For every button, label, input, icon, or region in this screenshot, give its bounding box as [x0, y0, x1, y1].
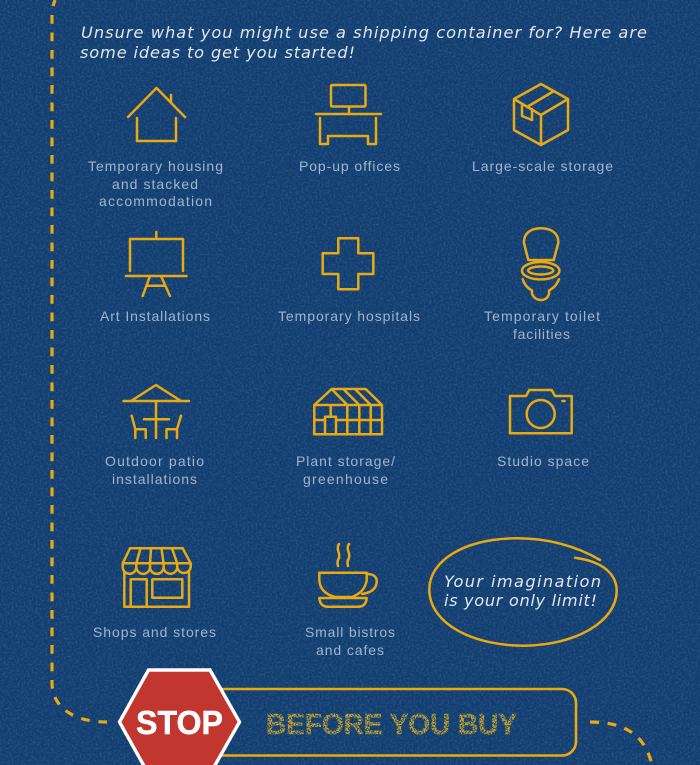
label: temporary toilet facilities: facilities [513, 326, 570, 342]
hand-drawn ellipse [429, 538, 617, 646]
label: small bistros and cafes [305, 624, 395, 658]
label: temporary housing: accommodation [99, 193, 212, 209]
intro text: some ideas to get you started! [80, 43, 355, 62]
item: plant storage / greenhouse [296, 389, 395, 487]
item: studio space [497, 390, 589, 469]
label: small bistros and cafes: and cafes [316, 642, 384, 658]
label: plant storage / greenhouse: greenhouse [303, 471, 388, 487]
item: temporary hospitals [278, 238, 420, 324]
item: outdoor patio installations [105, 385, 204, 487]
label: pop-up offices: Pop-up offices [299, 158, 400, 174]
dashed route line left [52, 0, 107, 722]
intro text [80, 23, 647, 62]
stop sign text: STOP [136, 704, 223, 741]
callout text: Your imagination [444, 572, 601, 591]
item: temporary toilet facilities [484, 228, 600, 342]
item: shops and stores [93, 548, 216, 640]
label: outdoor patio installations: installations [112, 471, 197, 487]
label: outdoor patio installations [105, 453, 204, 487]
stop sign [120, 670, 240, 765]
banner outline [205, 689, 576, 756]
icon: toilet [522, 228, 559, 300]
label: studio space: Studio space [497, 453, 589, 469]
item: pop-up offices [299, 85, 400, 174]
label: art installations: Art Installations [100, 308, 210, 324]
label: temporary housing: and stacked [112, 176, 198, 192]
label: outdoor patio installations: Outdoor patio [105, 453, 204, 469]
icon: easel [126, 232, 186, 296]
icon: cardboard box [514, 84, 568, 145]
icon: coffee cup [319, 544, 377, 607]
item: art installations [100, 232, 210, 324]
icon: camera [510, 390, 572, 433]
label: shops and stores: Shops and stores [93, 624, 216, 640]
callout: your imagination is your only limit [429, 538, 617, 646]
label: small bistros and cafes: Small bistros [305, 624, 395, 640]
label: temporary housing [88, 158, 223, 209]
label: large-scale storage: Large-scale storage [472, 158, 613, 174]
icon: patio table with parasol [124, 385, 189, 438]
icon: medical cross [323, 238, 373, 289]
banner heading: BEFORE YOU BUY [266, 709, 517, 741]
banner: stop before you buy [120, 670, 576, 765]
intro text: Unsure what you might use a shipping container for? Here are [81, 23, 647, 42]
callout text: is your only limit! [444, 591, 597, 610]
icon: house [128, 88, 185, 141]
item: small bistros and cafes [305, 544, 395, 658]
label: temporary toilet facilities: Temporary toilet [484, 308, 600, 324]
label: plant storage / greenhouse [296, 453, 395, 487]
dashed route line right [590, 722, 652, 765]
item: temporary housing [88, 88, 223, 209]
item: large-scale storage [472, 84, 613, 174]
callout text [444, 572, 601, 610]
label: plant storage / greenhouse: Plant storage/ [296, 453, 395, 469]
label: temporary hospitals: Temporary hospitals [278, 308, 420, 324]
icon: greenhouse [314, 389, 382, 434]
icon: shopfront [123, 548, 191, 607]
label: temporary toilet facilities [484, 308, 600, 342]
icon: desk and monitor [316, 85, 381, 144]
label: temporary housing: Temporary housing [88, 158, 223, 174]
